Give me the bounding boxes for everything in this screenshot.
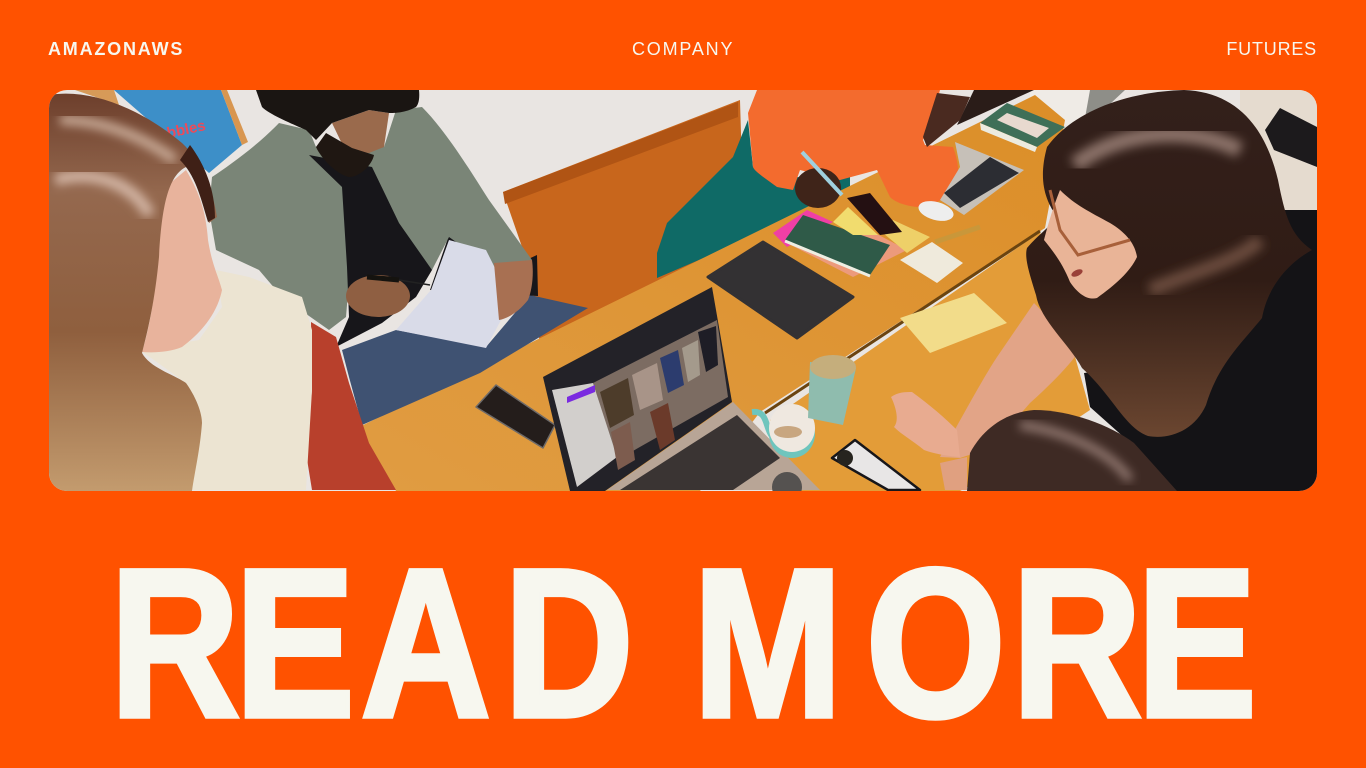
glasses	[1050, 190, 1130, 255]
hero photo: team meeting around a table	[49, 90, 1317, 491]
stationery stack	[773, 193, 980, 283]
upper right wall items	[957, 90, 1317, 210]
face	[1044, 190, 1137, 299]
first table	[359, 95, 1065, 491]
black top	[1084, 210, 1317, 491]
brand name: AMAZONAWS	[48, 39, 184, 59]
hand on notebook	[494, 260, 533, 320]
hand with pen	[346, 275, 410, 317]
long hair	[49, 94, 217, 491]
floor	[503, 100, 745, 345]
red sleeve	[306, 322, 396, 490]
woman in orange sweater	[748, 90, 970, 208]
jacket	[209, 107, 532, 330]
laptop centre	[543, 287, 820, 502]
mouse	[918, 201, 954, 221]
second table	[770, 232, 1090, 491]
glass of water	[808, 355, 856, 425]
woman in white vest	[49, 94, 396, 491]
white vest	[140, 270, 312, 490]
nav link: futures: FUTURES	[1226, 39, 1317, 59]
face	[332, 110, 389, 153]
woman with glasses	[891, 90, 1317, 491]
arm	[940, 303, 1080, 458]
mug	[752, 404, 815, 458]
teal trousers	[657, 120, 850, 278]
beard	[316, 133, 374, 177]
green book and phone	[980, 103, 1065, 152]
poster: bbles	[165, 117, 207, 142]
face	[142, 170, 222, 352]
man in green jacket	[209, 90, 588, 425]
long hair	[1026, 90, 1312, 437]
tablet	[708, 242, 853, 338]
jeans	[342, 295, 588, 425]
afro hair	[256, 90, 419, 140]
yellow notebook	[900, 293, 1007, 353]
t-shirt	[309, 155, 432, 347]
poster	[75, 90, 248, 173]
mouth	[1071, 269, 1083, 277]
gap between tables	[765, 231, 1040, 413]
phone on table left	[476, 385, 555, 448]
foreground head	[940, 410, 1177, 491]
dark laptop on shelf	[1265, 108, 1317, 167]
open notebook	[396, 240, 501, 348]
hand	[891, 392, 960, 457]
laptop right	[940, 142, 1024, 215]
headline: READ MORE	[110, 526, 1257, 761]
dark chair gap	[430, 235, 538, 296]
nav link: company: COMPANY	[632, 39, 734, 59]
phone on table right	[832, 440, 920, 490]
